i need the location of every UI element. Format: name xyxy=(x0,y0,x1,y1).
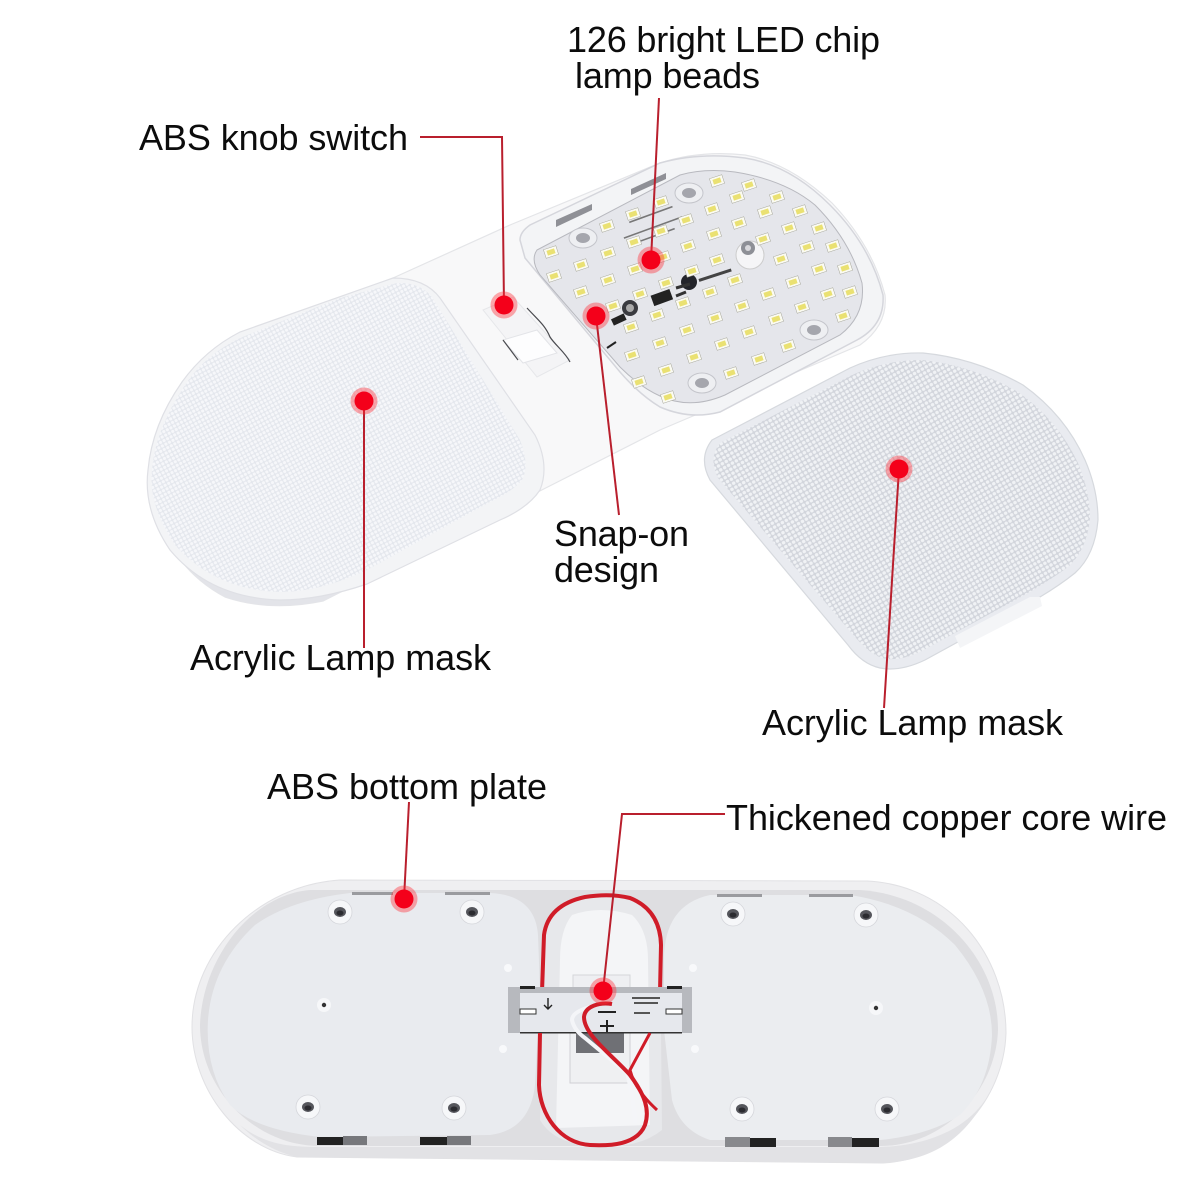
bottom lamp: rear view xyxy=(192,880,1006,1163)
metal bracket xyxy=(508,986,692,1034)
right plate xyxy=(664,895,992,1140)
LED circuit board xyxy=(534,171,863,403)
knob xyxy=(503,330,557,363)
leader: bottom plate xyxy=(404,802,409,899)
label: LED chip: 126 bright LED chip xyxy=(567,19,880,60)
bottom shell lip xyxy=(240,1100,985,1163)
label: knob switch: ABS knob switch xyxy=(139,117,408,158)
marker: LED chip xyxy=(638,246,664,274)
label: left mask: Acrylic Lamp mask xyxy=(190,637,492,678)
lower red wire xyxy=(539,1004,647,1145)
marker: snap-on xyxy=(582,302,610,330)
LED chips xyxy=(543,175,858,403)
leader: copper wire xyxy=(603,814,725,991)
black clips xyxy=(317,1136,879,1147)
left lens rim xyxy=(147,278,544,600)
plate slots xyxy=(352,892,853,897)
label: bottom plate: ABS bottom plate xyxy=(267,766,547,807)
marker: bottom plate xyxy=(390,886,418,912)
label: copper wire: Thickened copper core wire xyxy=(726,797,1167,838)
white wire xyxy=(572,1007,635,1123)
marker: right mask xyxy=(886,456,912,482)
inner tray xyxy=(200,890,998,1146)
leader: left mask xyxy=(363,401,365,648)
outer shell xyxy=(192,880,1006,1163)
leader: ABS knob switch xyxy=(420,137,504,305)
marker: wire xyxy=(590,978,616,1004)
centre channel xyxy=(540,896,662,1146)
second red wire xyxy=(630,1033,657,1110)
lamp body xyxy=(153,154,885,606)
leader: LED chip xyxy=(651,98,659,260)
LED frame xyxy=(520,156,883,415)
top lamp: assembled fixture xyxy=(147,154,885,606)
leader: right mask xyxy=(884,469,899,708)
label: snap-on design: Snap-on xyxy=(554,513,689,554)
label: LED chip: lamp beads xyxy=(575,55,760,96)
label: snap-on design: design xyxy=(554,549,659,590)
marker: knob xyxy=(490,292,518,318)
lamp body lower shadow xyxy=(153,490,515,606)
electronics xyxy=(607,206,732,348)
detached acrylic lamp mask right xyxy=(704,353,1098,669)
mounting holes xyxy=(569,228,597,248)
mask clip tab xyxy=(955,597,1042,648)
connector tabs xyxy=(556,204,592,227)
screw post xyxy=(736,241,764,269)
acrylic lamp mask left xyxy=(151,283,526,592)
screw holes xyxy=(296,900,899,1121)
leader: snap-on xyxy=(596,316,619,515)
marker: left mask xyxy=(350,388,378,414)
label: right mask: Acrylic Lamp mask xyxy=(762,702,1064,743)
upper red wire loop xyxy=(542,895,661,992)
switch housing xyxy=(483,297,570,377)
left plate xyxy=(208,893,540,1137)
